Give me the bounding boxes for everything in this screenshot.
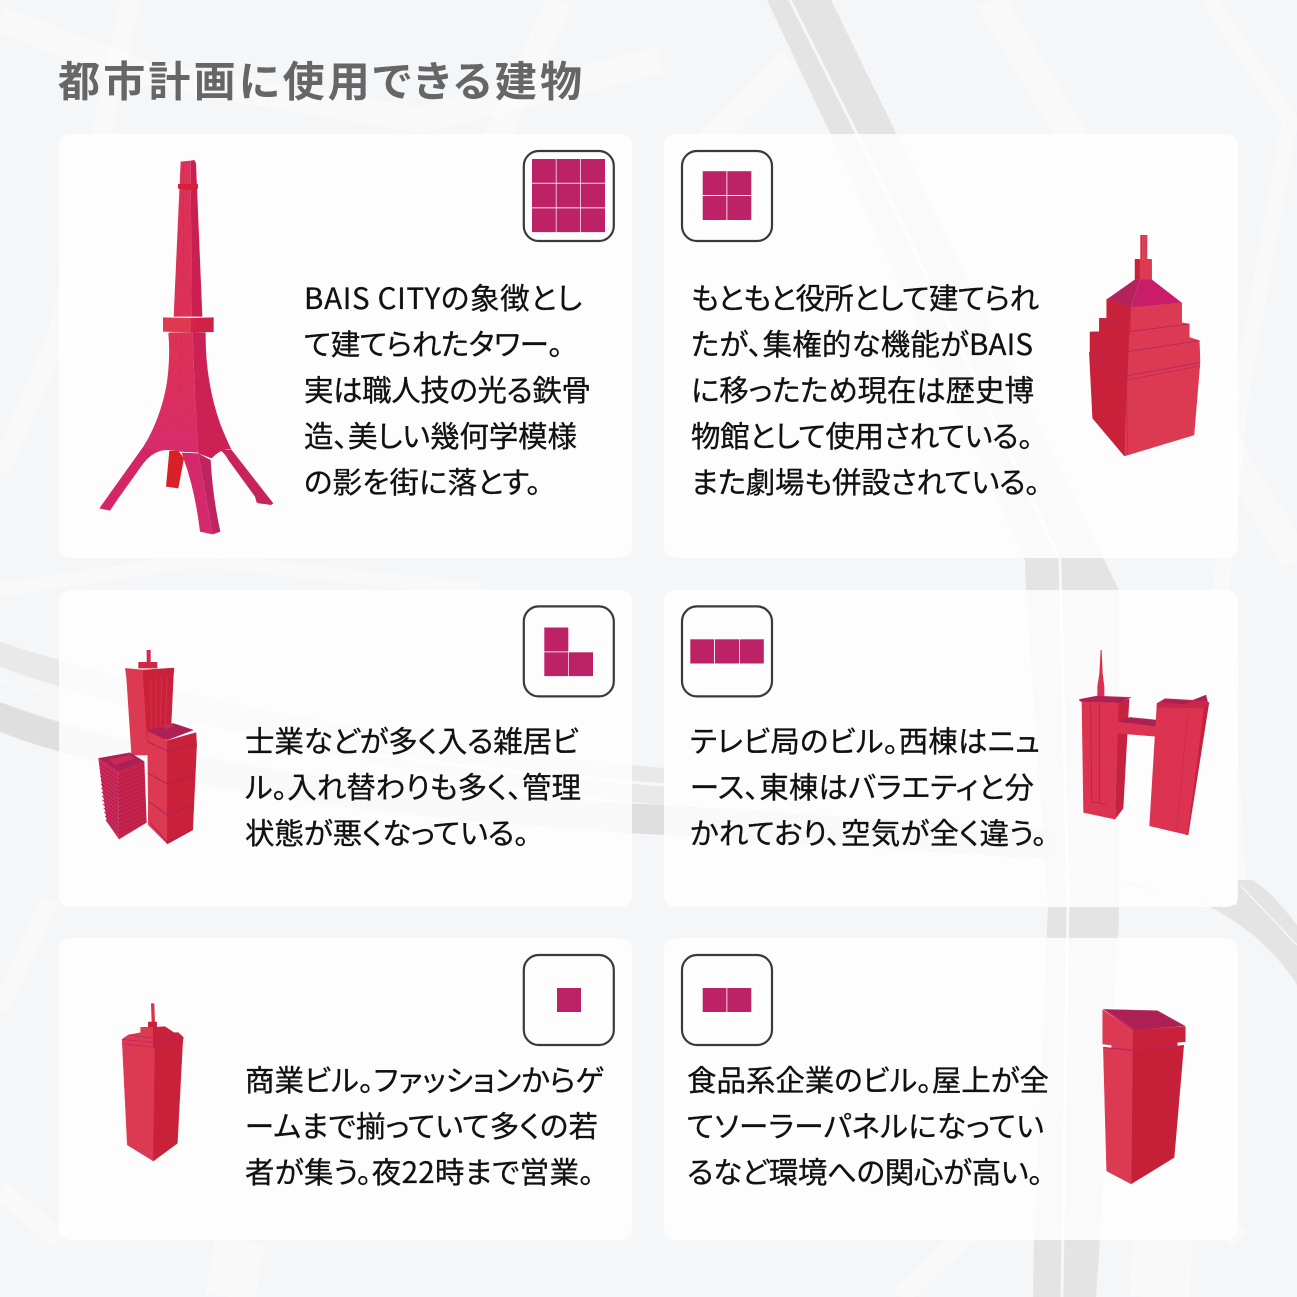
text: tower description: の影を街に落とす。 (304, 460, 541, 502)
building: solar roof block (1103, 1009, 1185, 1184)
panel: food company building (664, 938, 1238, 1240)
text: commercial description: 商業ビル。ファッションからゲ (245, 1058, 604, 1100)
text: office complex description: 状態が悪くなっている。 (245, 811, 529, 853)
text: museum description: また劇場も併設されている。 (691, 460, 1040, 502)
text: food company description: るなど環境への関心が高い。 (687, 1150, 1043, 1192)
text: TV station description (690, 719, 1047, 853)
text: office complex description: 士業などが多く入る雑居ビ (245, 719, 579, 761)
building: office towers (98, 650, 197, 844)
icon: L-shaped footprint (524, 606, 614, 696)
text: commercial description: 者が集う。夜22時まで営業。 (245, 1150, 594, 1192)
panel: tower (59, 134, 632, 558)
text: tower description: て建てられたタワー。 (304, 322, 563, 364)
building: twin towers with bridge (1079, 650, 1209, 835)
building: lattice tower (99, 160, 273, 534)
text: museum description: たが、集権的な機能がBAIS (691, 322, 1033, 364)
text: office complex description (245, 719, 581, 853)
text: tower description (304, 276, 591, 502)
text: TV station description: かれており、空気が全く違う。 (690, 811, 1047, 853)
icon: 2x1 footprint (682, 955, 772, 1045)
text: tower description: 造、美しい幾何学模様 (304, 414, 577, 456)
panel: commercial building (59, 938, 632, 1240)
text: museum description: に移ったため現在は歴史博 (691, 368, 1034, 410)
icon: 3x1 footprint (682, 606, 772, 696)
text: food company description (687, 1058, 1049, 1192)
text: commercial description: ームまで揃っていて多くの若 (245, 1104, 598, 1146)
panel: office complex (59, 590, 632, 907)
title: 都市計画に使用できる建物 (58, 48, 582, 110)
text: museum description (691, 276, 1040, 502)
text: museum description: もともと役所として建てられ (691, 276, 1039, 318)
icon: single cell footprint (524, 955, 614, 1045)
icon: 3x3 footprint (524, 151, 614, 241)
text: commercial description (245, 1058, 604, 1192)
panel: TV station (664, 590, 1238, 907)
text: tower description: 実は職人技の光る鉄骨 (304, 368, 591, 410)
panel: museum (664, 134, 1238, 558)
text: office complex description: ル。入れ替わりも多く、管理 (245, 765, 581, 807)
building: commercial tower (122, 1003, 183, 1161)
text: food company description: てソーラーパネルになってい (687, 1104, 1044, 1146)
text: TV station description: テレビ局のビル。西棟はニュ (690, 719, 1040, 761)
text: tower description: BAIS CITYの象徴とし (304, 276, 582, 318)
building: stepped museum (1089, 235, 1200, 456)
text: museum description: 物館として使用されている。 (691, 414, 1033, 456)
text: food company description: 食品系企業のビル。屋上が全 (687, 1058, 1049, 1100)
icon: 2x2 footprint (682, 151, 772, 241)
text: TV station description: ース、東棟はバラエティと分 (690, 765, 1034, 807)
